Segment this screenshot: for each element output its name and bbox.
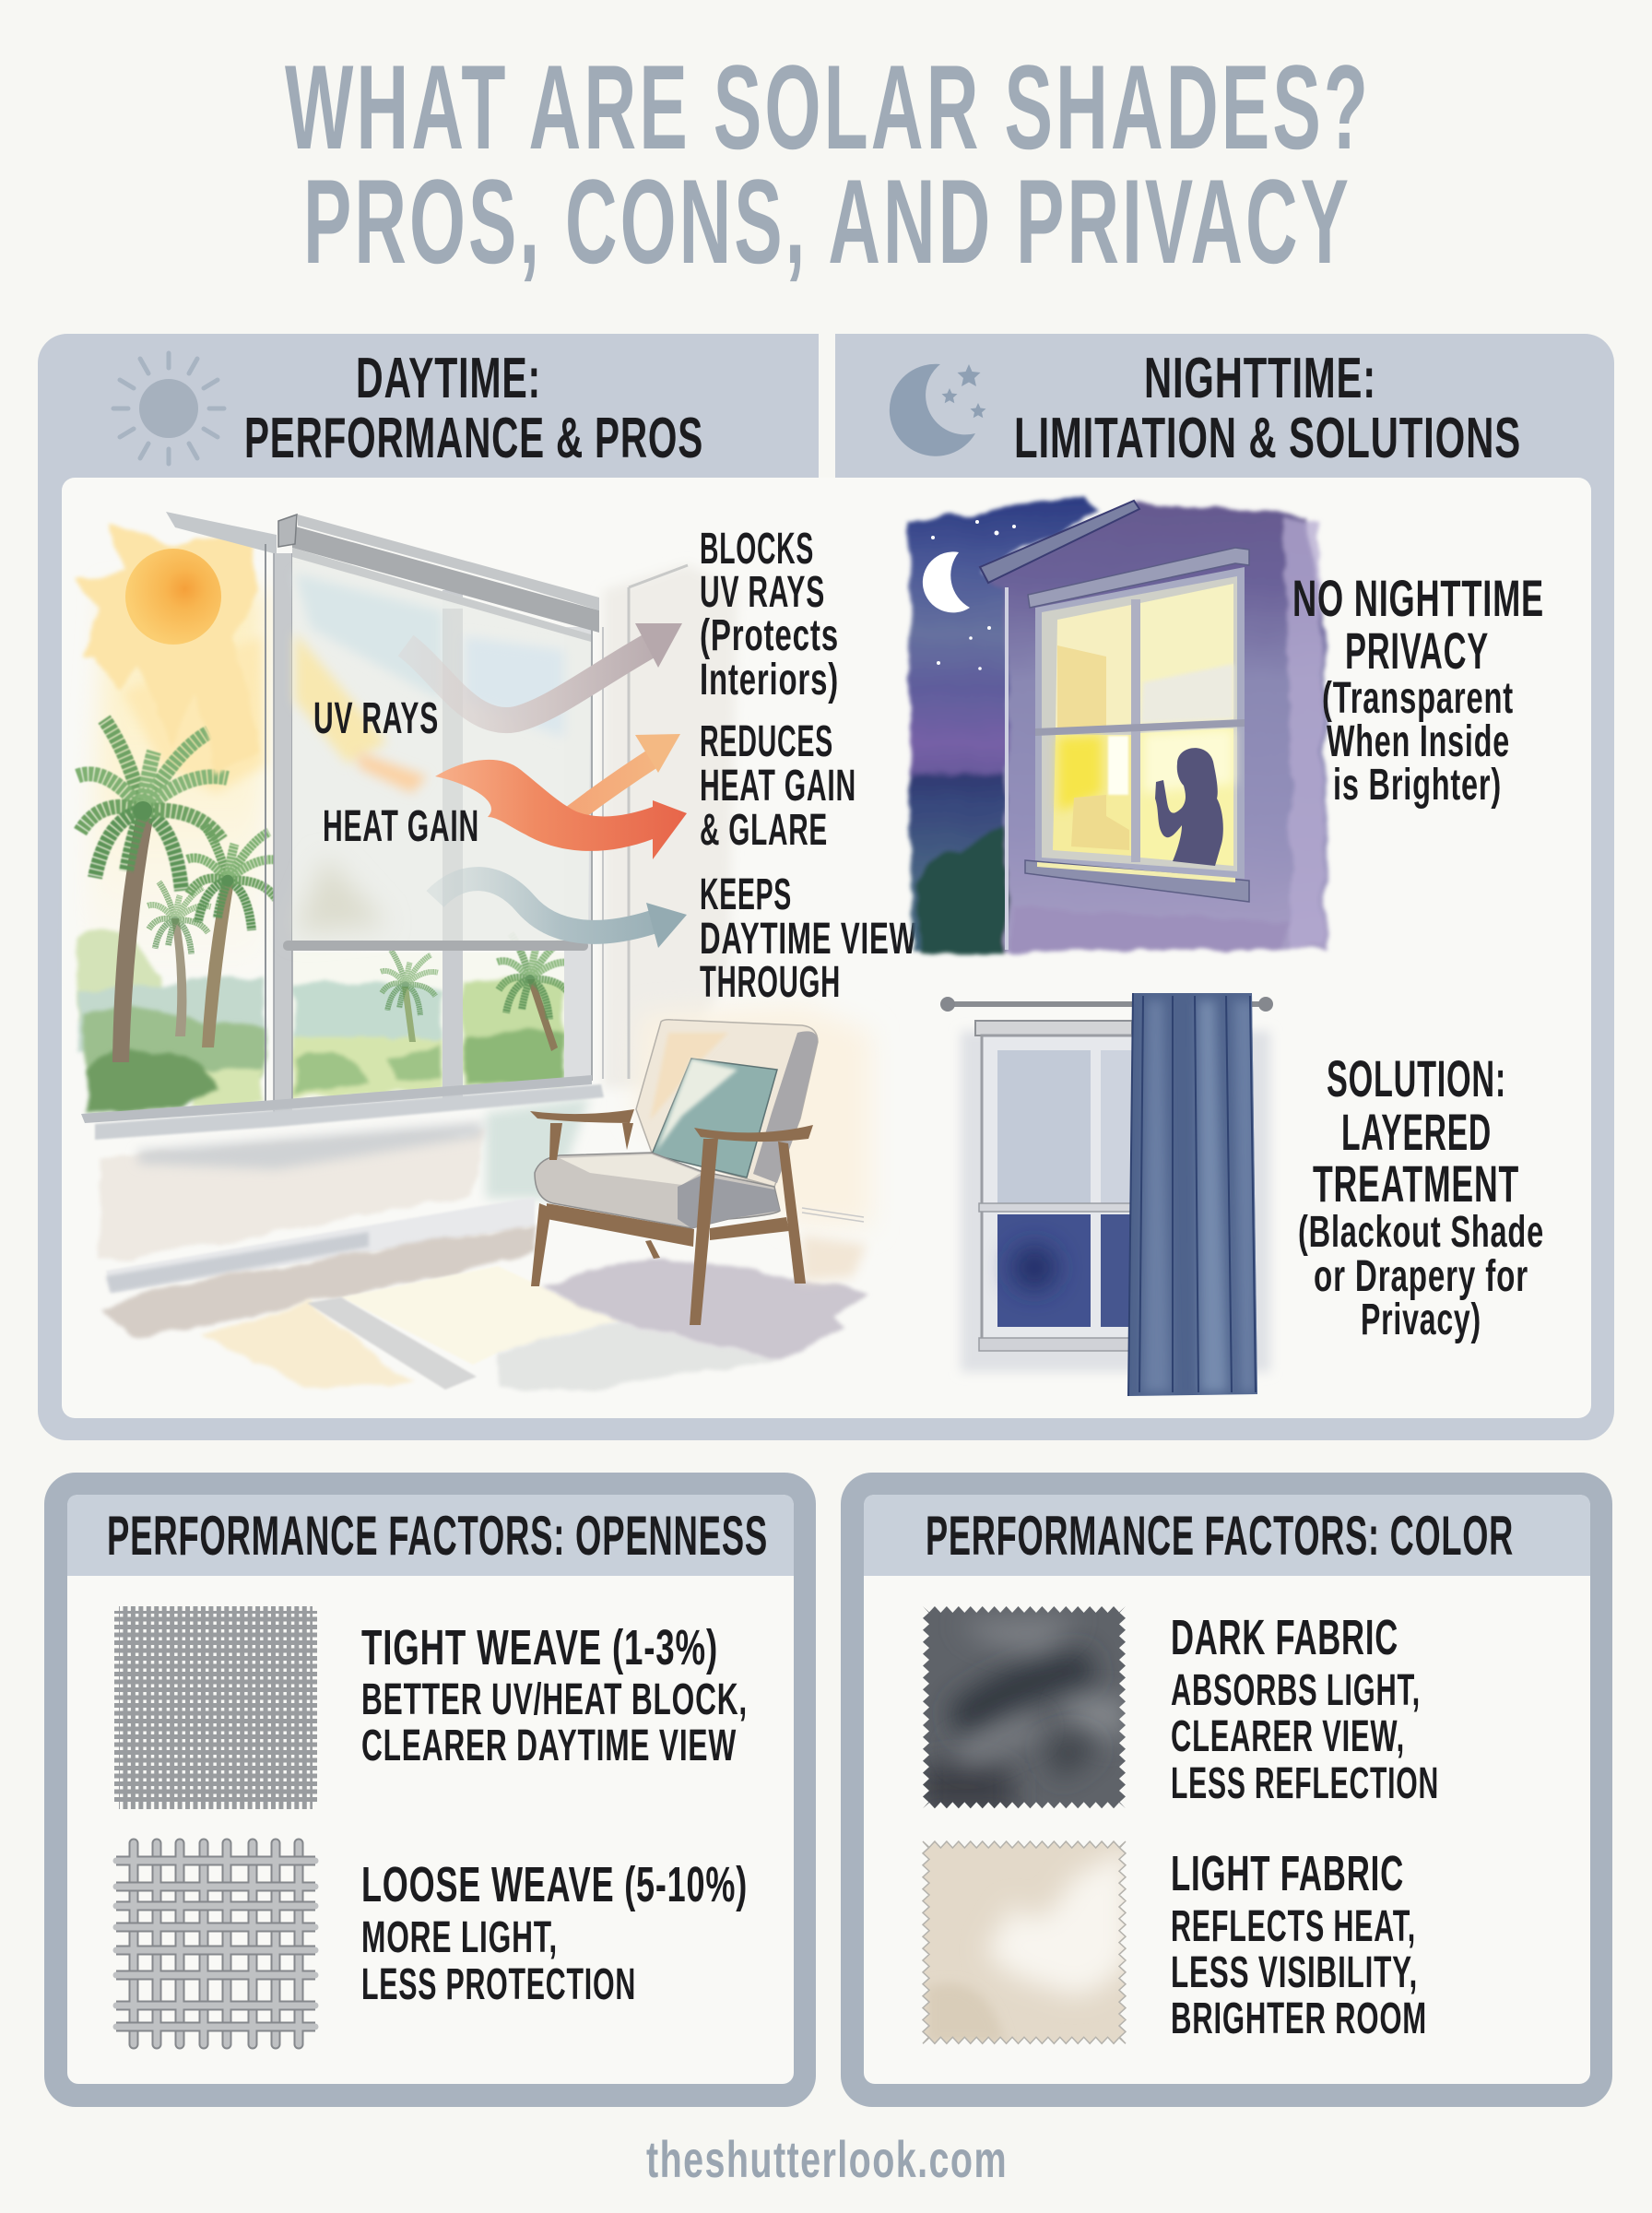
text: day benefits: HEAT GAIN	[700, 762, 856, 811]
text: layered solution: (Blackout Shade	[1298, 1208, 1544, 1257]
text: loose weave: LESS PROTECTION	[361, 1960, 636, 2009]
text: loose weave: MORE LIGHT,	[361, 1913, 558, 1962]
heading: openness: PERFORMANCE FACTORS: OPENNESS	[107, 1505, 768, 1567]
heading: nighttime	[1014, 347, 1521, 470]
panel: openness	[44, 1473, 816, 2107]
roof	[980, 501, 1139, 950]
icon: sun	[113, 353, 224, 464]
text: day benefits: THROUGH	[700, 958, 841, 1007]
heading: nighttime: NIGHTTIME:	[1144, 347, 1376, 410]
labels on shade: UV RAYS	[313, 694, 439, 743]
moon and stars	[923, 520, 1016, 670]
text: tight weave: BETTER UV/HEAT BLOCK,	[361, 1675, 748, 1724]
labels on shade: HEAT GAIN	[323, 802, 479, 851]
text: day benefits: UV RAYS	[700, 568, 825, 617]
illustration: layered curtain window	[940, 993, 1273, 1396]
text: loose weave	[361, 1857, 748, 2009]
text: light fabric: REFLECTS HEAT,	[1171, 1902, 1416, 1951]
text: no nighttime privacy: PRIVACY	[1345, 621, 1489, 680]
palm trees	[77, 719, 280, 1062]
arrow: UV rays	[406, 623, 682, 720]
text: dark fabric: DARK FABRIC	[1171, 1610, 1398, 1665]
arrow: heat gain	[435, 734, 687, 859]
text: tight weave: TIGHT WEAVE (1-3%)	[361, 1620, 718, 1675]
text: day benefits: DAYTIME VIEW	[700, 915, 917, 964]
lit window	[1025, 548, 1249, 902]
text: light fabric: LIGHT FABRIC	[1171, 1846, 1404, 1901]
heading: daytime: PERFORMANCE & PROS	[244, 407, 703, 470]
text: layered solution: or Drapery for	[1314, 1252, 1528, 1301]
labels on shade	[313, 694, 479, 851]
text: day benefits: BLOCKS	[700, 525, 814, 574]
text: no nighttime privacy: is Brighter)	[1333, 761, 1502, 810]
text: tight weave: CLEARER DAYTIME VIEW	[361, 1722, 737, 1770]
panel: daytime and nighttime	[38, 327, 1614, 1440]
swatch: loose weave	[116, 1843, 315, 2044]
sun	[77, 525, 261, 775]
text: day benefits: KEEPS	[700, 870, 792, 919]
silhouette: woman	[1155, 748, 1223, 866]
solar shade	[278, 515, 599, 951]
swatch: tight weave	[114, 1606, 317, 1809]
text: day benefits	[700, 525, 917, 1007]
text: day benefits: Interiors)	[700, 656, 839, 704]
text: tight weave	[361, 1620, 748, 1770]
outdoor sky wash	[83, 590, 265, 977]
window view below shade	[293, 933, 572, 1100]
text: day benefits: REDUCES	[700, 717, 833, 766]
illustration: armchair	[530, 1020, 818, 1325]
panel: color	[841, 1473, 1612, 2107]
text: layered solution: SOLUTION:	[1327, 1049, 1506, 1107]
text: layered solution	[1298, 1049, 1544, 1344]
swatch: light fabric	[922, 1840, 1127, 2045]
text: layered solution: TREATMENT	[1313, 1154, 1519, 1213]
room wall and floor washes	[99, 564, 871, 1390]
text: light fabric: BRIGHTER ROOM	[1171, 1994, 1427, 2043]
heading: daytime	[244, 347, 703, 470]
text: layered solution: LAYERED	[1341, 1103, 1492, 1161]
outdoor bushes	[77, 929, 265, 1114]
text: dark fabric	[1171, 1610, 1439, 1808]
text: no nighttime privacy	[1292, 569, 1544, 810]
text: no nighttime privacy: (Transparent	[1322, 674, 1514, 723]
icon: moon and stars	[890, 364, 986, 456]
text: no nighttime privacy: When Inside	[1327, 717, 1510, 766]
text: loose weave: LOOSE WEAVE (5-10%)	[361, 1857, 748, 1912]
night wash	[908, 498, 1328, 953]
text: day benefits: & GLARE	[700, 806, 828, 855]
heading: daytime: DAYTIME:	[356, 347, 541, 410]
illustration: daytime room	[77, 512, 917, 1390]
arrow: daytime view	[435, 879, 687, 948]
title	[285, 40, 1371, 289]
text: dark fabric: ABSORBS LIGHT,	[1171, 1666, 1421, 1715]
footer: website: theshutterlook.com	[646, 2130, 1008, 2188]
text: dark fabric: LESS REFLECTION	[1171, 1759, 1439, 1808]
illustration: night window	[908, 498, 1328, 953]
text: day benefits: (Protects	[700, 611, 839, 660]
text: dark fabric: CLEARER VIEW,	[1171, 1712, 1405, 1761]
text: layered solution: Privacy)	[1361, 1296, 1481, 1344]
text: light fabric: LESS VISIBILITY,	[1171, 1948, 1418, 1997]
text: light fabric	[1171, 1846, 1427, 2043]
swatch: dark fabric	[923, 1606, 1126, 1809]
window frame and sill	[81, 512, 688, 1140]
curtain	[1128, 993, 1257, 1396]
